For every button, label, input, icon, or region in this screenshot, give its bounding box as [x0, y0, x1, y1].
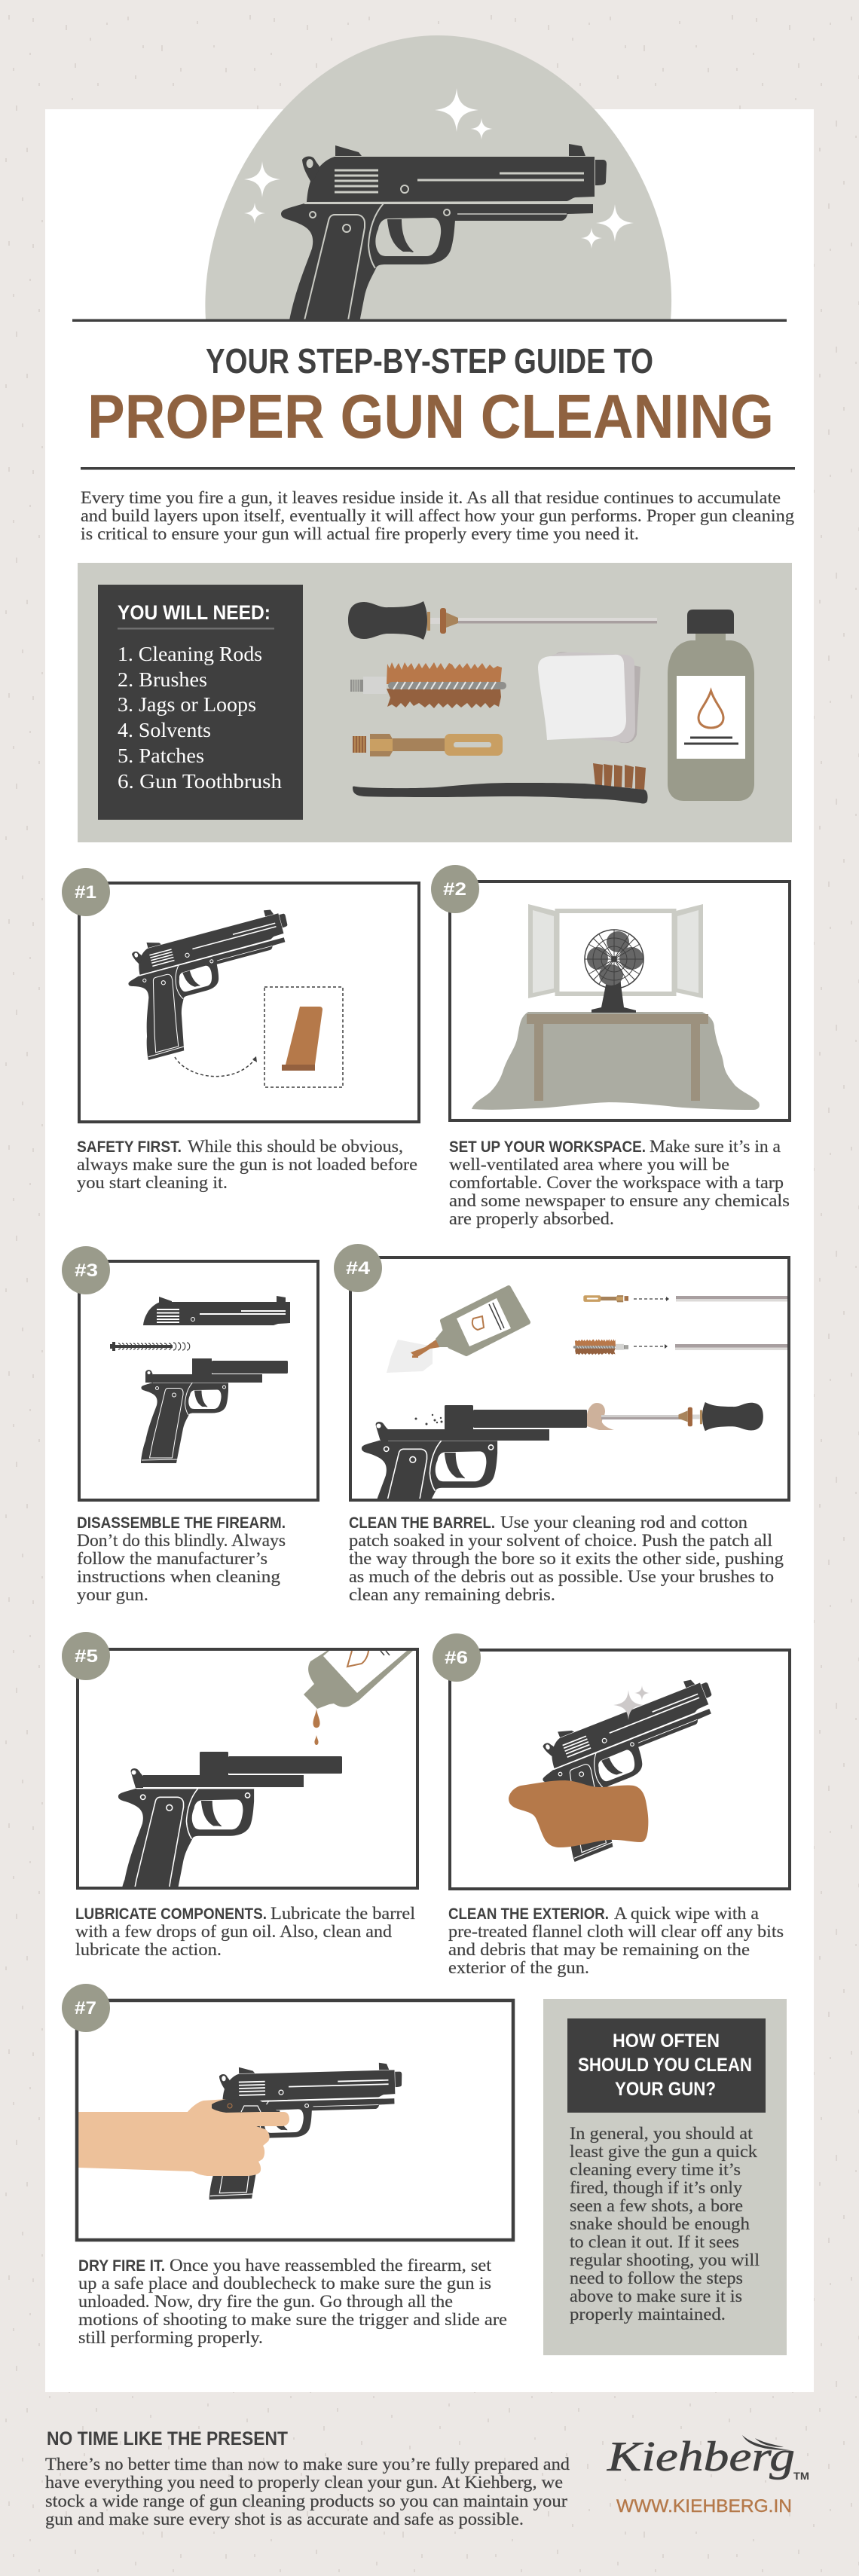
footer text: [45, 2428, 570, 2529]
intro text: and build layers upon itself, eventually it will affect how your gun performs. Proper gun cleaning: [81, 506, 794, 526]
body text: cleaning every time it’s: [570, 2160, 741, 2180]
badge: #7: [75, 1998, 96, 2018]
body text: properly maintained.: [570, 2305, 726, 2324]
logo: Kiehberg: [607, 2434, 795, 2480]
caption: always make sure the gun is not loaded before: [77, 1155, 417, 1175]
caption: and some newspaper to ensure any chemicals: [449, 1191, 790, 1211]
body text: seen a few shots, a bore: [570, 2196, 743, 2216]
icon: jag: [353, 734, 503, 756]
caption: your gun.: [77, 1585, 148, 1605]
logo: [607, 2434, 809, 2516]
badge: [433, 1633, 481, 1682]
badge: [334, 1244, 382, 1292]
panel: step 3: [62, 1246, 318, 1605]
icon: patches: [538, 652, 640, 743]
caption: exterior of the gun.: [448, 1958, 589, 1978]
illustration: wiping the gun: [509, 1673, 750, 1862]
caption: CLEAN THE EXTERIOR.: [448, 1905, 609, 1923]
caption: [75, 1904, 415, 1960]
caption: Use your cleaning rod and cotton: [500, 1513, 747, 1532]
checklist box: 3. Jags or Loops: [118, 693, 256, 716]
caption: follow the manufacturer’s: [77, 1549, 267, 1569]
caption: SAFETY FIRST.: [77, 1138, 182, 1156]
panel: step 7: [62, 1984, 513, 2348]
caption: While this should be obvious,: [188, 1137, 403, 1157]
checklist box: 5. Patches: [118, 744, 204, 767]
heading box: YOUR GUN?: [615, 2079, 716, 2100]
title: [81, 341, 795, 470]
caption: CLEAN THE BARREL.: [349, 1514, 495, 1532]
caption: and debris that may be remaining on the: [448, 1940, 750, 1960]
intro text: is critical to ensure your gun will actual fire properly every time you need it.: [81, 524, 639, 544]
icon: brush: [350, 662, 506, 708]
badge: #6: [445, 1648, 468, 1668]
logo: TM: [793, 2470, 809, 2482]
caption: still performing properly.: [78, 2328, 263, 2348]
caption: with a few drops of gun oil. Also, clean and: [75, 1922, 392, 1942]
caption: [78, 2256, 507, 2348]
footer text: There’s no better time than now to make sure you’re fully prepared and: [45, 2455, 570, 2474]
caption: Don’t do this blindly. Always: [77, 1531, 286, 1551]
caption: lubricate the action.: [75, 1940, 222, 1960]
caption: LUBRICATE COMPONENTS.: [75, 1905, 267, 1923]
caption: well-ventilated area where you will be: [449, 1155, 729, 1175]
illustration: disassembled firearm: [110, 1296, 290, 1463]
panel: step 1: [62, 868, 419, 1193]
caption: motions of shooting to make sure the trigger and slide are: [78, 2310, 507, 2330]
panel: step 5: [62, 1632, 417, 1960]
illustration: oiling the barrel: [118, 1651, 413, 1914]
gun and cleaning rod: [362, 1405, 587, 1499]
caption: [77, 1137, 417, 1193]
heading box: SHOULD YOU CLEAN: [578, 2055, 752, 2076]
caption: DRY FIRE IT.: [78, 2257, 165, 2275]
caption: as much of the debris out as possible. Use your brushes to: [349, 1567, 774, 1587]
panel: how often: [543, 1999, 787, 2355]
logo: WWW.KIEHBERG.IN: [616, 2496, 792, 2516]
badge: [62, 868, 110, 916]
checklist box: 6. Gun Toothbrush: [118, 770, 283, 793]
body text: In general, you should at: [570, 2124, 753, 2144]
illustration: hand dry firing: [78, 2062, 405, 2199]
caption: pre-treated flannel cloth will clear off any bits: [448, 1922, 784, 1942]
illustration: cleaning the barrel: [361, 1288, 790, 1566]
jag and rod: [583, 1295, 790, 1302]
body text: to clean it out. If it sees: [570, 2232, 739, 2252]
hero illustration: [72, 35, 787, 322]
badge: [62, 1246, 110, 1294]
caption: SET UP YOUR WORKSPACE.: [449, 1138, 646, 1156]
caption: comfortable. Cover the workspace with a tarp: [449, 1173, 784, 1193]
caption: A quick wipe with a: [614, 1904, 760, 1924]
checklist box: 1. Cleaning Rods: [118, 643, 262, 665]
caption: the way through the bore so it exits the other side, pushing: [349, 1549, 784, 1569]
icon: toothbrush: [353, 763, 648, 804]
badge: #3: [75, 1260, 98, 1281]
body text: need to follow the steps: [570, 2269, 743, 2288]
caption: you start cleaning it.: [77, 1173, 228, 1193]
body text: regular shooting, you will: [570, 2251, 760, 2270]
checklist box: YOU WILL NEED:: [118, 601, 271, 624]
caption: clean any remaining debris.: [349, 1585, 555, 1605]
panel: step 6: [433, 1633, 790, 1978]
caption: unloaded. Now, dry fire the gun. Go through all the: [78, 2292, 453, 2312]
footer text: NO TIME LIKE THE PRESENT: [47, 2428, 288, 2449]
icon: sparkles: [244, 88, 634, 249]
caption: Once you have reassembled the firearm, set: [170, 2256, 491, 2275]
body text: [570, 2124, 760, 2324]
intro text: Every time you fire a gun, it leaves residue inside it. As all that residue continues to accumulate: [81, 488, 781, 508]
badge: #1: [75, 882, 96, 903]
checklist box: [98, 585, 303, 820]
body text: least give the gun a quick: [570, 2142, 757, 2162]
caption: DISASSEMBLE THE FIREARM.: [77, 1514, 286, 1532]
footer text: stock a wide range of gun cleaning products so you can maintain your: [45, 2492, 567, 2511]
brush and rod: [573, 1339, 790, 1355]
checklist box: 2. Brushes: [118, 668, 207, 691]
checklist box: 4. Solvents: [118, 719, 211, 741]
caption: [449, 1137, 790, 1229]
title: PROPER GUN CLEANING: [87, 381, 774, 451]
caption: [349, 1513, 784, 1605]
title: YOUR STEP-BY-STEP GUIDE TO: [206, 341, 653, 380]
badge: [62, 1632, 110, 1680]
badge: [431, 865, 479, 913]
body text: snake should be enough: [570, 2214, 750, 2234]
caption: Lubricate the barrel: [271, 1904, 415, 1924]
icon: pistol: [281, 144, 607, 319]
white content panel: [45, 109, 814, 2392]
caption: instructions when cleaning: [77, 1567, 280, 1587]
badge: [62, 1984, 110, 2032]
panel: step 2: [431, 865, 790, 1229]
body text: fired, though if it’s only: [570, 2178, 742, 2198]
badge: #5: [75, 1646, 98, 1667]
illustration: gun and magazine: [119, 906, 343, 1087]
caption: Make sure it’s in a: [650, 1137, 781, 1157]
icon: cleaning rod: [348, 601, 657, 640]
hero backdrop arch: [205, 35, 671, 320]
caption: [77, 1514, 286, 1605]
caption: are properly absorbed.: [449, 1209, 614, 1229]
panel: step 4: [334, 1244, 790, 1605]
illustration: workspace with fan: [472, 904, 760, 1110]
badge: #4: [346, 1258, 371, 1279]
body text: above to make sure it is: [570, 2287, 742, 2306]
footer text: gun and make sure every shot is as accurate and safe as possible.: [45, 2510, 524, 2529]
caption: [448, 1904, 784, 1978]
panel: you will need: [78, 563, 792, 842]
badge: #2: [443, 879, 466, 900]
heading box: [567, 2018, 766, 2113]
heading box: HOW OFTEN: [613, 2031, 720, 2052]
icon: solvent bottle: [668, 610, 754, 801]
caption: up a safe place and doublecheck to make sure the gun is: [78, 2274, 491, 2293]
intro text: [81, 488, 794, 544]
footer text: have everything you need to properly clean your gun. At Kiehberg, we: [45, 2473, 563, 2492]
caption: patch soaked in your solvent of choice. Push the patch all: [349, 1531, 772, 1551]
